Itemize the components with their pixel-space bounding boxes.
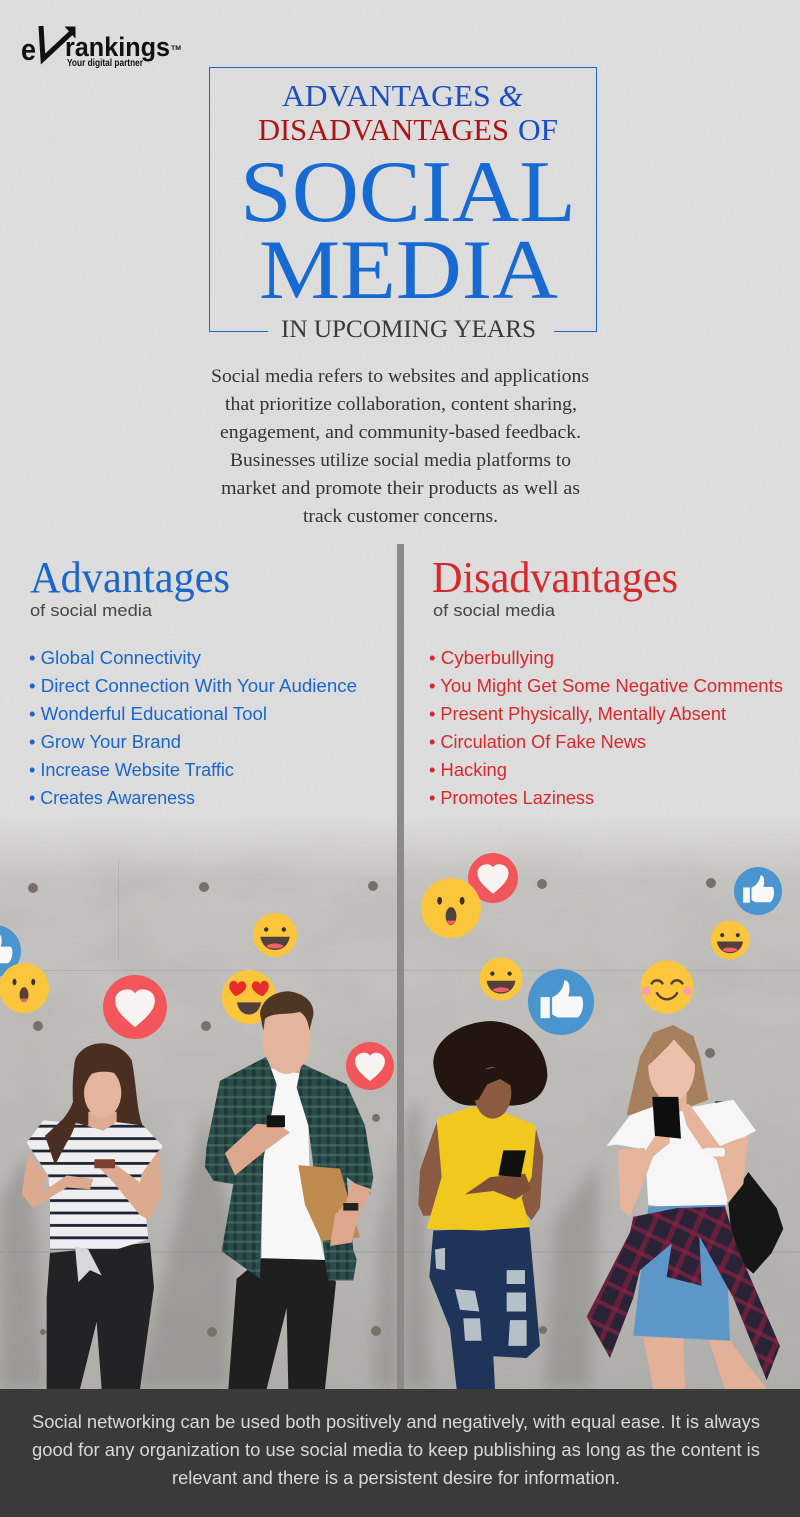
icon: heart, left	[103, 975, 167, 1039]
intro paragraph: track customer concerns.	[303, 506, 498, 527]
title: ADVANTAGES &	[282, 78, 523, 113]
centre divider	[397, 544, 404, 1389]
logo: e	[21, 32, 36, 67]
disadvantages list: • You Might Get Some Negative Comments	[429, 676, 783, 696]
intro paragraph: market and promote their products as well as	[221, 478, 580, 499]
photo: woman in yellow top	[418, 1021, 547, 1389]
icon: surprised emoji, far left	[0, 963, 49, 1013]
title: OF	[518, 112, 558, 147]
icon: partial thumbs up, far left	[0, 925, 21, 977]
intro paragraph: Social media refers to websites and applications	[211, 366, 589, 387]
logo	[21, 26, 181, 69]
photo: man in plaid shirt	[205, 991, 373, 1389]
icon: smiling emoji, top left	[253, 913, 297, 957]
footer band	[0, 1389, 800, 1517]
advantages list: • Grow Your Brand	[29, 732, 181, 752]
title	[240, 78, 576, 343]
advantages heading: of social media	[30, 601, 153, 620]
advantages list: • Direct Connection With Your Audience	[29, 676, 357, 696]
footer text: relevant and there is a persistent desire for information.	[172, 1468, 620, 1488]
icon: blushing emoji	[640, 960, 694, 1014]
logo: rankings	[65, 32, 170, 62]
disadvantages heading: of social media	[433, 601, 556, 620]
title: SOCIAL	[240, 144, 576, 241]
disadvantages list: • Circulation Of Fake News	[429, 732, 646, 752]
icon: heart, top centre	[468, 853, 518, 903]
disadvantages list	[429, 648, 783, 808]
panel: advantages	[29, 553, 357, 808]
title: MEDIA	[259, 223, 558, 317]
advantages list	[29, 648, 357, 808]
advantages heading: Advantages	[30, 553, 230, 602]
icon: large thumbs up	[528, 969, 594, 1035]
intro paragraph: engagement, and community-based feedback.	[220, 422, 581, 443]
disadvantages list: • Cyberbullying	[429, 648, 554, 668]
panel: disadvantages	[429, 553, 783, 808]
intro paragraph: Businesses utilize social media platforms to	[230, 450, 571, 471]
intro paragraph	[211, 366, 589, 527]
logo: TM	[171, 46, 181, 52]
photo: woman in white tee	[587, 1025, 783, 1389]
advantages list: • Increase Website Traffic	[29, 760, 234, 780]
logo arrow mark	[41, 26, 75, 59]
icon: heart eyes emoji	[222, 970, 276, 1024]
title frame	[210, 68, 596, 332]
advantages list: • Global Connectivity	[29, 648, 201, 668]
icon: thumbs up, top right	[734, 867, 782, 915]
intro paragraph: that prioritize collaboration, content sharing,	[225, 394, 577, 415]
icon: surprised emoji, top centre	[421, 878, 481, 938]
footer text	[32, 1412, 760, 1488]
logo: Your digital partner	[67, 58, 143, 69]
advantages list: • Wonderful Educational Tool	[29, 704, 267, 724]
disadvantages list: • Promotes Laziness	[429, 788, 594, 808]
disadvantages list: • Hacking	[429, 760, 507, 780]
icon: smiling emoji, centre	[480, 958, 522, 1000]
icon: smiling emoji, top right	[710, 920, 750, 960]
photo wall: seams, holes and shadows	[0, 860, 800, 1389]
disadvantages heading: Disadvantages	[432, 553, 678, 602]
footer text: Social networking can be used both positively and negatively, with equal ease. It is always	[32, 1412, 760, 1432]
icon: heart, right of man	[346, 1042, 394, 1090]
advantages list: • Creates Awareness	[29, 788, 195, 808]
title: DISADVANTAGES	[258, 112, 509, 147]
title: IN UPCOMING YEARS	[281, 316, 536, 343]
photo: woman in striped shirt	[22, 1043, 163, 1389]
disadvantages list: • Present Physically, Mentally Absent	[429, 704, 726, 724]
footer text: good for any organization to use social media to keep publishing as long as the content is	[32, 1440, 760, 1460]
